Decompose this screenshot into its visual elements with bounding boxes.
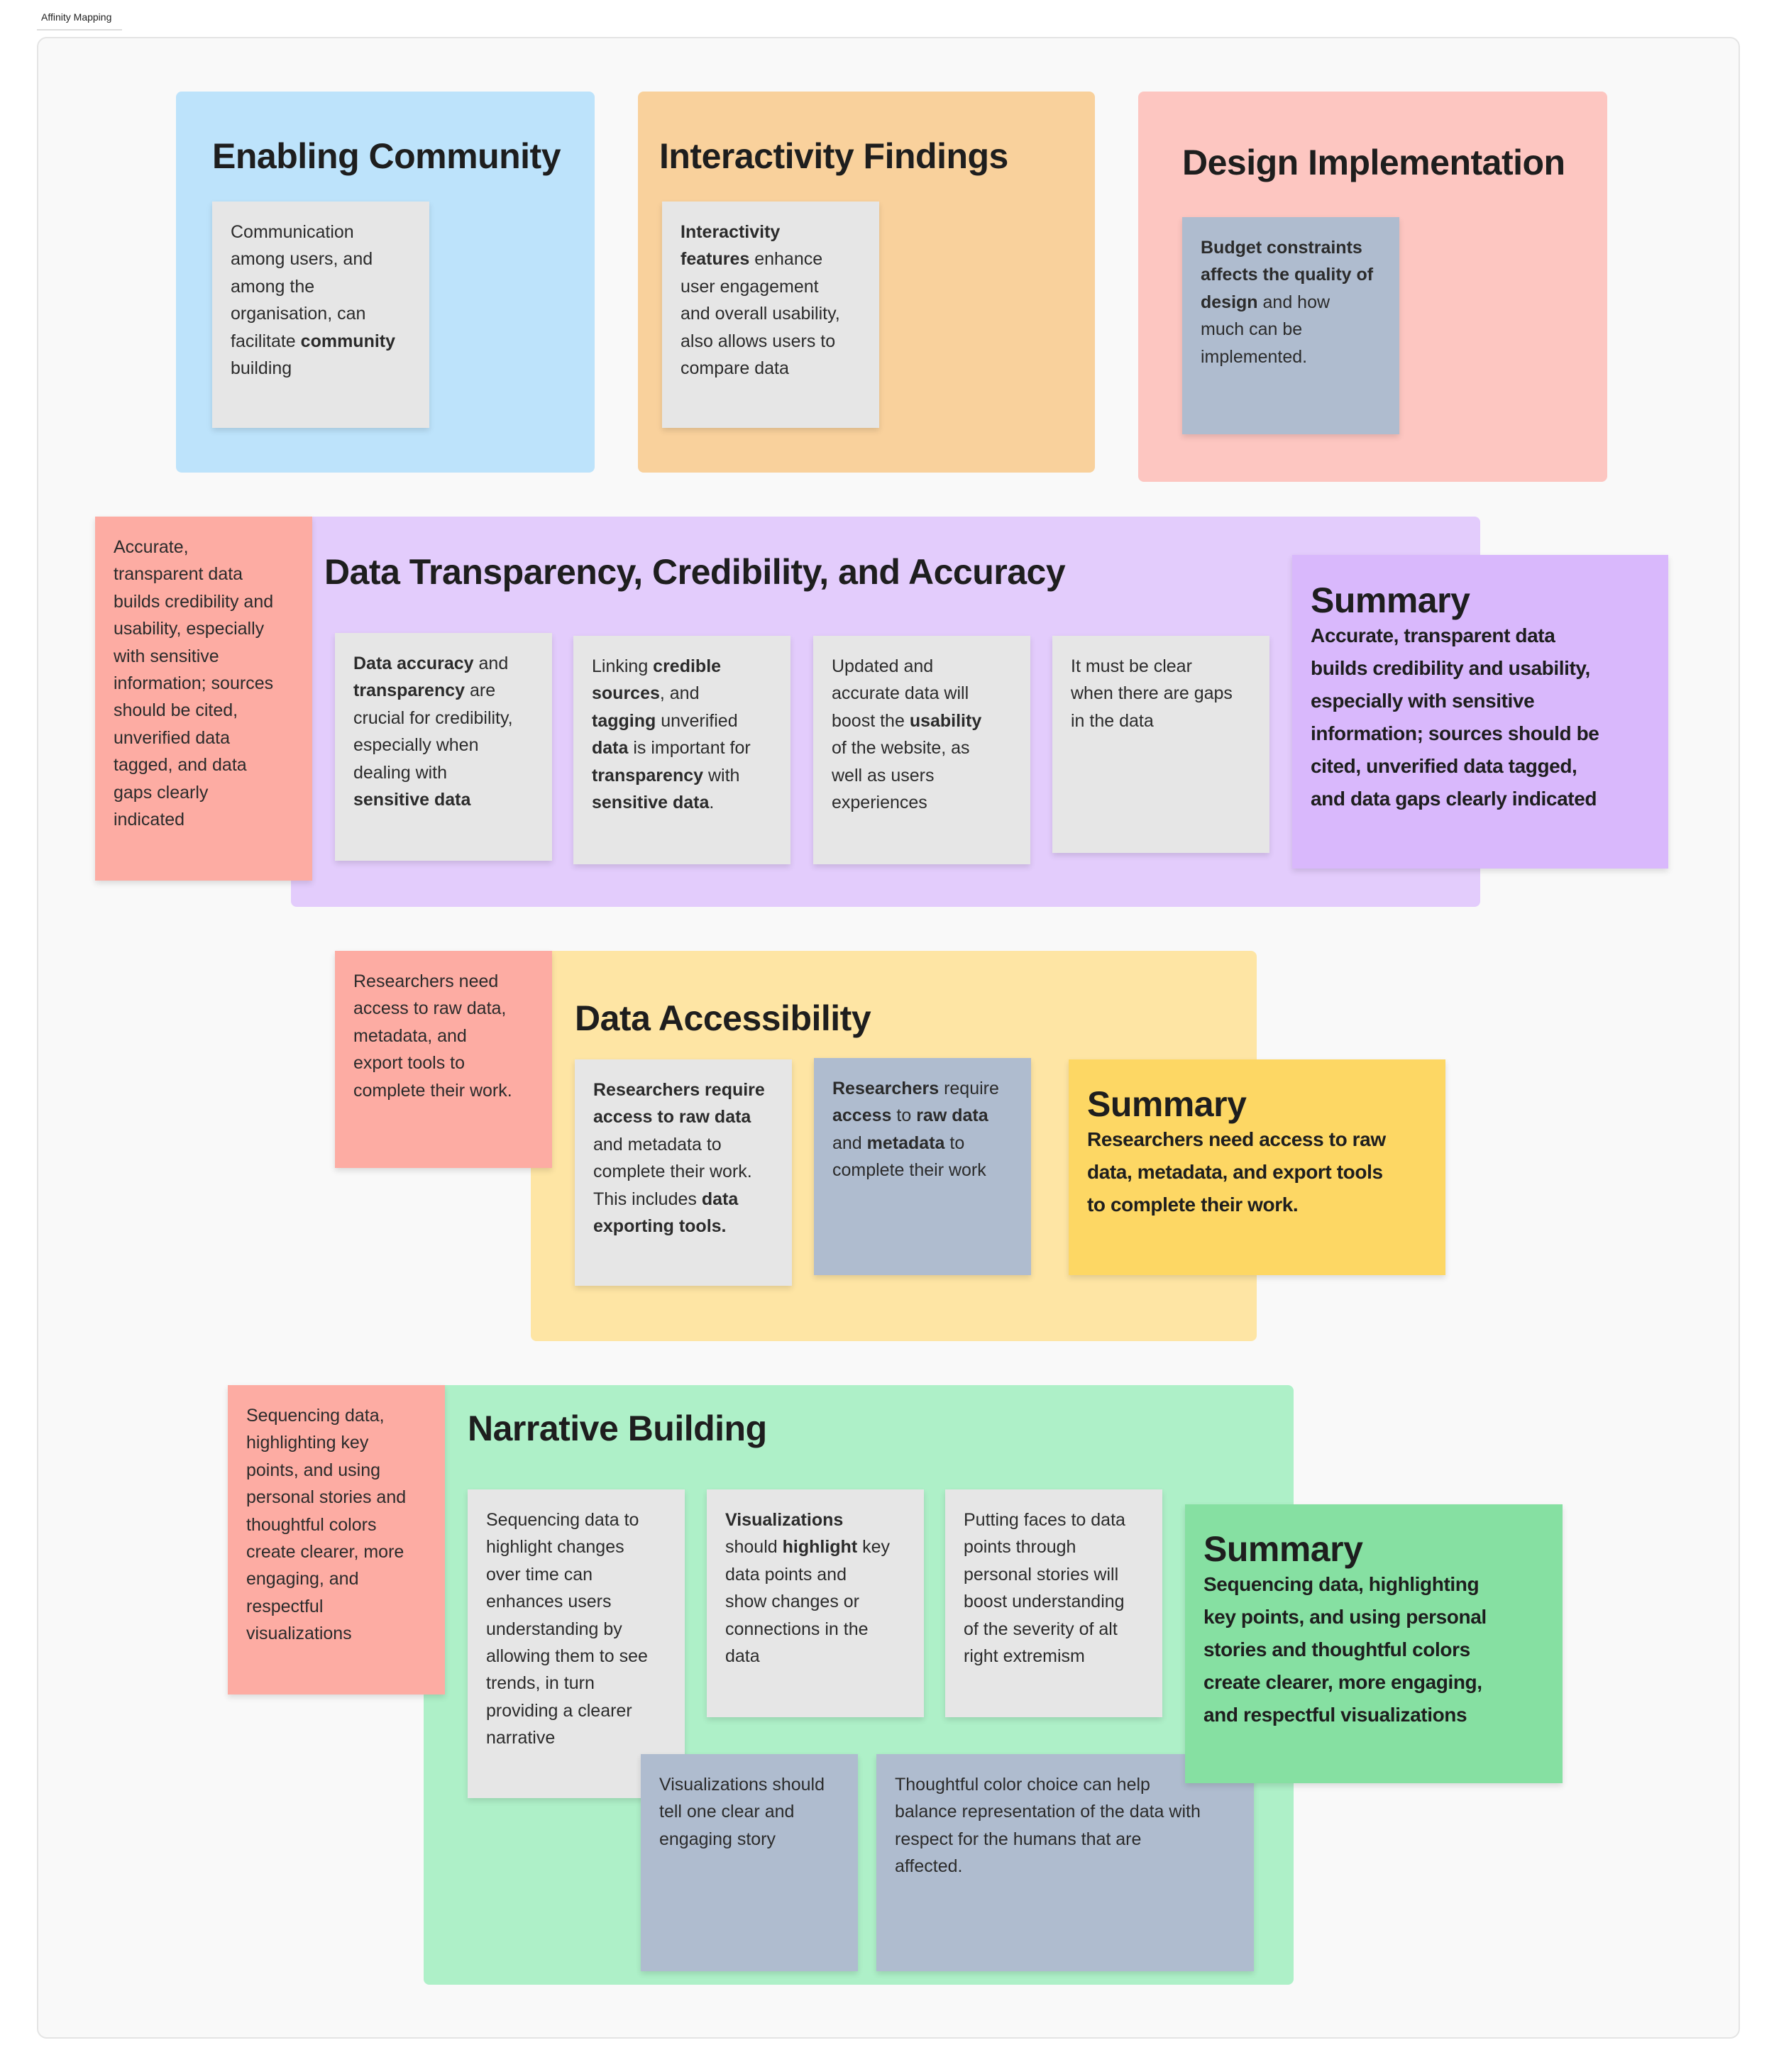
summary: transparency: especially with sensitive [1311,690,1534,712]
note: sequencing data: trends, in turn [486,1673,595,1693]
summary: transparency: and data gaps clearly indicated [1311,788,1597,810]
summary: narrative: create clearer, more engaging, [1203,1671,1482,1693]
note: data accuracy: sensitive data [353,790,470,810]
note: raw data metadata: access to raw data [832,1106,988,1125]
note: updated data: accurate data will [832,683,969,703]
note: transparency insight: information; sources [114,673,273,693]
panel: Data Transparency [291,517,1480,907]
summary: accessibility: to complete their work. [1087,1194,1298,1216]
note: updated data: boost the usability [832,711,981,731]
note: researchers require access: and metadata to [593,1135,722,1155]
note: narrative insight: create clearer, more [246,1542,404,1562]
note: narrative insight: engaging, and [246,1569,358,1589]
note: communication: among users, and [231,249,373,269]
note: visualizations highlight: data points and [725,1565,847,1585]
note: updated data: well as users [832,766,934,786]
note: accessibility insight [335,951,552,1168]
note: narrative insight: points, and using [246,1460,380,1480]
note: visualizations highlight: Visualizations [725,1510,843,1530]
note: interactivity features: features enhance [681,249,822,269]
summary: transparency: Summary [1311,580,1470,620]
summary: transparency: cited, unverified data tagged, [1311,755,1577,777]
note: interactivity features [662,202,879,428]
note: linking credible sources: sources, and [592,683,700,703]
label: Affinity Mapping: Affinity Mapping [41,11,111,23]
note: one clear story [641,1754,858,1971]
summary: transparency: Accurate, transparent data [1311,624,1555,646]
summary: narrative: Sequencing data, highlighting [1203,1573,1479,1595]
note: putting faces: of the severity of alt [964,1619,1118,1639]
note: researchers require access: exporting tools. [593,1216,727,1236]
note: one clear story: tell one clear and [659,1802,794,1822]
note: sequencing data: enhances users [486,1592,612,1611]
summary: transparency [1292,555,1668,869]
note: data gaps [1052,636,1269,853]
note: sequencing data: providing a clearer [486,1701,632,1721]
note: putting faces: boost understanding [964,1592,1125,1611]
note: communication [212,202,429,428]
note: researchers require access: Researchers require [593,1080,765,1100]
note: transparency insight: tagged, and data [114,755,247,775]
note: data accuracy: Data accuracy and [353,654,508,673]
note: sequencing data [468,1489,685,1798]
note: updated data: Updated and [832,656,933,676]
note: putting faces: points through [964,1537,1076,1557]
note: budget constraints: much can be [1201,319,1302,339]
note: putting faces [945,1489,1162,1717]
note: interactivity features: and overall usability, [681,304,840,324]
note: narrative insight: thoughtful colors [246,1515,376,1535]
note: communication: Communication [231,222,354,242]
note: transparency insight: gaps clearly [114,783,208,803]
summary: accessibility: Summary [1087,1084,1246,1124]
note: interactivity features: user engagement [681,277,819,297]
note: sequencing data: allowing them to see [486,1646,648,1666]
note: visualizations highlight: show changes or [725,1592,859,1611]
note: thoughtful color: affected. [895,1856,962,1876]
note: putting faces: right extremism [964,1646,1085,1666]
summary: accessibility: Researchers need access to raw [1087,1128,1386,1150]
note: data gaps: It must be clear [1071,656,1192,676]
heading: Data Transparency, Credibility, and Accuracy: Data Transparency, Credibility, and Accuracy [324,552,1065,592]
note: researchers require access: complete their work. [593,1162,752,1181]
summary: narrative: and respectful visualizations [1203,1704,1467,1726]
note: thoughtful color: Thoughtful color choice can help [895,1775,1150,1795]
note: communication: facilitate community [231,331,395,351]
note: budget constraints: design and how [1201,292,1330,312]
note: raw data metadata [814,1058,1031,1275]
heading: Enabling Community: Enabling Community [212,136,561,176]
note: linking credible sources: tagging unverified [592,711,738,731]
summary: narrative: stories and thoughtful colors [1203,1638,1470,1660]
note: putting faces: Putting faces to data [964,1510,1125,1530]
note: data accuracy: transparency are [353,680,495,700]
note: narrative insight: visualizations [246,1624,352,1643]
note: data accuracy: dealing with [353,763,447,783]
note: sequencing data: highlight changes [486,1537,624,1557]
note: raw data metadata: complete their work [832,1160,986,1180]
note: interactivity features: also allows users to [681,331,835,351]
note: narrative insight: Sequencing data, [246,1406,385,1426]
note: accessibility insight: complete their work. [353,1081,512,1101]
note: communication: building [231,358,292,378]
note: researchers require access: access to raw data [593,1107,751,1127]
note: transparency insight: builds credibility and [114,592,273,612]
panel: Interactivity Findings [638,92,1095,473]
note: linking credible sources: transparency with [592,766,739,786]
note: accessibility insight: access to raw data, [353,998,506,1018]
summary: transparency: information; sources should be [1311,722,1599,744]
note: one clear story: engaging story [659,1829,776,1849]
note: transparency insight: should be cited, [114,700,238,720]
note: sequencing data: over time can [486,1565,593,1585]
heading: Data Accessibility: Data Accessibility [575,998,871,1038]
panel: Enabling Community [176,92,595,473]
summary: accessibility: data, metadata, and export tools [1087,1161,1383,1183]
note: linking credible sources: sensitive data. [592,793,714,812]
note: accessibility insight: metadata, and [353,1026,467,1046]
label: Affinity Mapping [37,4,122,31]
note: interactivity features: Interactivity [681,222,780,242]
note: data gaps: when there are gaps [1071,683,1233,703]
note: data gaps: in the data [1071,711,1154,731]
note: sequencing data: narrative [486,1728,555,1748]
note: sequencing data: Sequencing data to [486,1510,639,1530]
summary: transparency: builds credibility and usability, [1311,657,1590,679]
note: putting faces: personal stories will [964,1565,1118,1585]
note: budget constraints: implemented. [1201,347,1307,367]
note: accessibility insight: Researchers need [353,971,498,991]
note: transparency insight: with sensitive [114,646,219,666]
note: interactivity features: compare data [681,358,789,378]
note: transparency insight [95,517,312,881]
note: one clear story: Visualizations should [659,1775,825,1795]
note: thoughtful color: respect for the humans that are [895,1829,1141,1849]
note: narrative insight: highlighting key [246,1433,368,1453]
heading: Design Implementation: Design Implementation [1182,143,1565,182]
note: thoughtful color [876,1754,1254,1971]
summary: accessibility [1069,1059,1445,1275]
note: linking credible sources: data is important for [592,738,751,758]
note: data accuracy: especially when [353,735,478,755]
note: communication: among the [231,277,314,297]
note: linking credible sources: Linking credible [592,656,721,676]
note: transparency insight: transparent data [114,564,243,584]
note: visualizations highlight [707,1489,924,1717]
panel: Design Implementation [1138,92,1607,482]
note: budget constraints: Budget constraints [1201,238,1362,258]
note: updated data: of the website, as [832,738,970,758]
note: linking credible sources [573,636,790,864]
note: narrative insight [228,1385,445,1694]
note: narrative insight: respectful [246,1597,323,1616]
note: updated data [813,636,1030,864]
note: accessibility insight: export tools to [353,1053,465,1073]
note: narrative insight: personal stories and [246,1487,406,1507]
panel: Data Accessibility [531,951,1257,1341]
note: updated data: experiences [832,793,927,812]
note: transparency insight: Accurate, [114,537,189,557]
note: researchers require access [575,1059,792,1286]
note: visualizations highlight: data [725,1646,760,1666]
note: researchers require access: This includes data [593,1189,738,1209]
note: budget constraints [1182,217,1399,434]
note: raw data metadata: Researchers require [832,1079,999,1098]
summary: narrative: Summary [1203,1529,1362,1569]
note: budget constraints: affects the quality of [1201,265,1373,285]
heading: Interactivity Findings: Interactivity Findings [659,136,1008,176]
note: raw data metadata: and metadata to [832,1133,964,1153]
note: transparency insight: indicated [114,810,184,830]
summary: narrative [1185,1504,1563,1783]
note: transparency insight: usability, especially [114,619,264,639]
summary: narrative: key points, and using personal [1203,1606,1487,1628]
note: data accuracy: crucial for credibility, [353,708,513,728]
panel: Narrative Building [424,1385,1294,1985]
note: data accuracy [335,633,552,861]
note: visualizations highlight: connections in the [725,1619,869,1639]
heading: Narrative Building: Narrative Building [468,1409,767,1448]
note: thoughtful color: balance representation of the data with [895,1802,1201,1822]
note: visualizations highlight: should highlight key [725,1537,890,1557]
note: transparency insight: unverified data [114,728,230,748]
note: communication: organisation, can [231,304,365,324]
note: sequencing data: understanding by [486,1619,622,1639]
